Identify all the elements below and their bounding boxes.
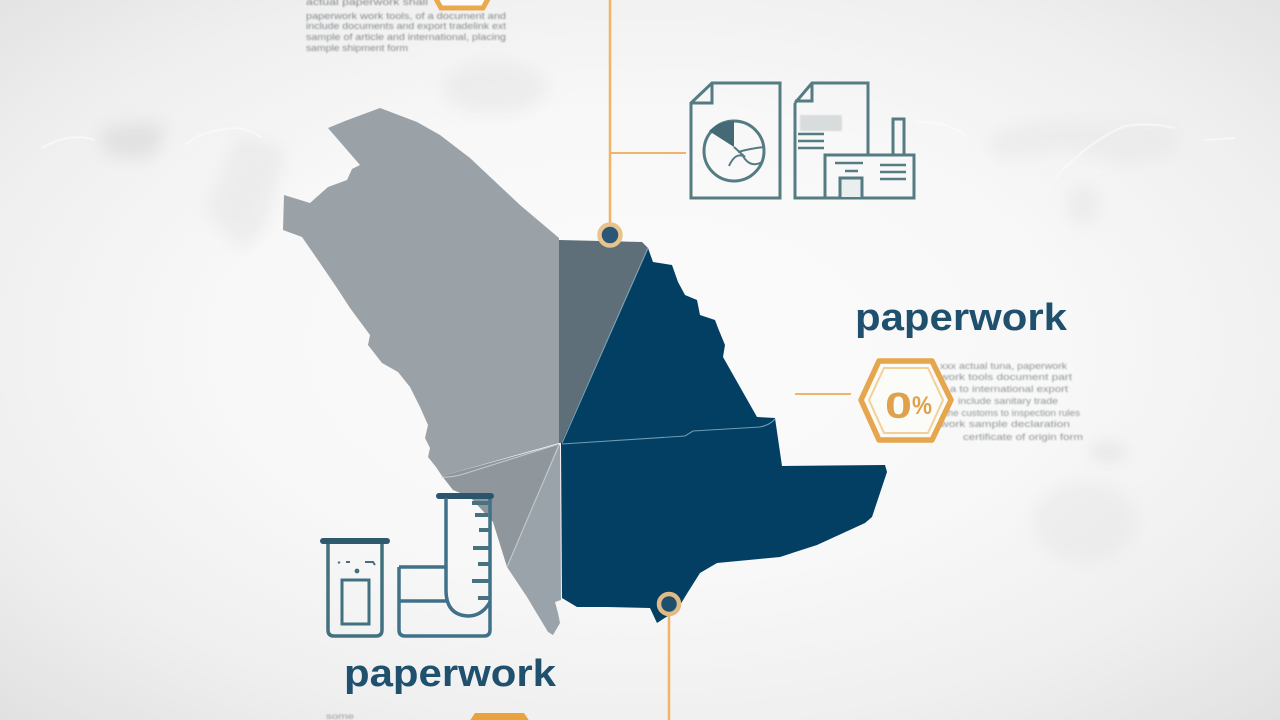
icon: top hexagon badge (cropped): [430, 0, 494, 8]
map internal borders: [442, 248, 775, 567]
connector: right hexagon line: [795, 393, 851, 395]
icon: hexagon badge 0%: %: [912, 392, 932, 420]
connector: top vertical with node: [600, 0, 686, 246]
text block: right description: work sample declaration: [939, 419, 1070, 430]
heading: bottom paperwork: paperwork: [344, 653, 557, 695]
text block: right description: the customs to inspection rules: [945, 408, 1080, 419]
icon: document with factory: [795, 83, 914, 198]
map: [283, 108, 887, 635]
icon: test tube in measuring vessel: [399, 496, 491, 636]
text block: top description: sample shipment form: [306, 43, 408, 54]
text block: right description: xxx actual tuna, paperwork: [940, 361, 1067, 372]
text block: top description: sample of article and international, placing: [306, 32, 506, 43]
map region: navy east: [561, 248, 887, 623]
faint world-map smudges: [100, 62, 1180, 562]
map region: grey south: [442, 444, 559, 567]
text block: right description: a to international export: [950, 384, 1068, 395]
map region: slate north: [559, 240, 648, 443]
text block: top description: paperwork work tools, of a document and: [306, 11, 506, 22]
icon: beaker with label: [323, 541, 387, 636]
map region: large grey west: [283, 108, 559, 476]
map region: light grey south tip: [507, 444, 561, 635]
text block: right description: work tools document part: [939, 372, 1072, 383]
icon: hexagon badge 0%: [861, 361, 951, 440]
icon: document with pie chart: [691, 83, 780, 198]
icon: hexagon badge 0%: 0: [885, 385, 912, 426]
text block: top description: [306, 0, 506, 54]
text block: top description: include documents and export tradelink ext: [306, 21, 506, 32]
heading: right paperwork: paperwork: [855, 297, 1068, 339]
connector: bottom vertical with node: [659, 594, 679, 720]
icon: bottom hexagon badge (cropped): [469, 713, 530, 720]
text block: right description: [939, 361, 1083, 443]
text block: right description: include sanitary trade: [958, 396, 1058, 407]
text block: right description: certificate of origin form: [963, 432, 1083, 443]
